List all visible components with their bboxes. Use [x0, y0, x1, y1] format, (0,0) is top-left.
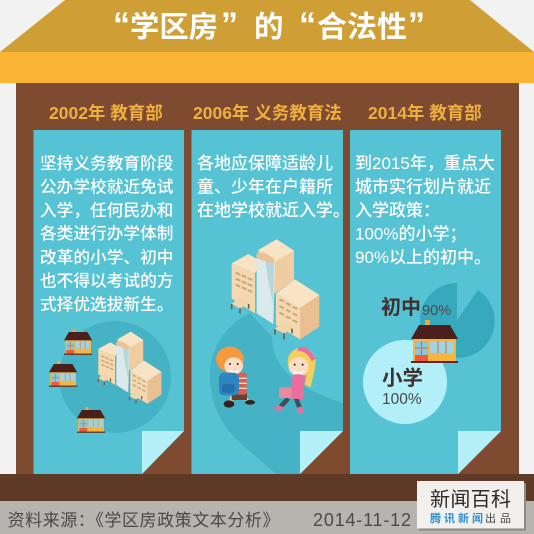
- text block 2014: [355, 154, 495, 267]
- text block 2006: 在地学校就近入学。: [197, 200, 350, 220]
- paper sheet 2006: [192, 130, 343, 474]
- roof eave band: [0, 52, 534, 83]
- source bar: [0, 501, 534, 534]
- icon: girl: [274, 347, 316, 413]
- fold 2002: [142, 431, 184, 474]
- text block 2002: 各类进行办学体制: [40, 223, 174, 243]
- floor band: [0, 474, 534, 501]
- title: [113, 6, 425, 44]
- text block 2002: 公办学校就近免试: [40, 176, 174, 196]
- title: ”: [408, 6, 425, 44]
- title: 的: [254, 11, 284, 44]
- text block 2014: 入学政策：: [355, 200, 440, 220]
- circle: primary 100%: [363, 340, 447, 424]
- fold 2006: [300, 431, 343, 474]
- house roof: [0, 0, 534, 52]
- house wall: [16, 83, 519, 475]
- label: primary: 小学: [382, 366, 423, 390]
- column headings: 2014年 教育部: [368, 103, 482, 123]
- logo badge: 新闻百科: [430, 488, 511, 511]
- text block 2002: 改革的小学、初中: [40, 247, 174, 267]
- circle behind school: [59, 321, 171, 433]
- text block 2002: 式择优选拔新生。: [40, 295, 174, 314]
- text block 2002: 也不得以考试的方: [40, 270, 174, 290]
- pie: junior high 90%: [420, 283, 495, 358]
- icon: school buildings: [232, 239, 319, 339]
- panel: 2006: [192, 130, 350, 474]
- label: junior high: [381, 296, 451, 319]
- icon: house top: [64, 329, 92, 355]
- title: “: [113, 6, 130, 44]
- text block 2002: [40, 154, 174, 314]
- logo badge: 出品: [485, 511, 511, 525]
- title: 合法性: [317, 11, 407, 44]
- icon: house middle: [49, 361, 77, 387]
- label: junior high: 初中: [381, 296, 421, 319]
- title: ”: [221, 6, 238, 44]
- icon: boy: [216, 347, 255, 408]
- title: 学区房: [130, 11, 218, 44]
- logo badge: 腾讯新闻: [430, 511, 483, 525]
- column headings: [49, 103, 482, 123]
- path shadow: [210, 313, 343, 474]
- text block 2014: 城市实行划片就近: [355, 176, 491, 196]
- text block 2006: 各地应保障适龄儿: [197, 154, 333, 173]
- panel: 2014: [350, 130, 501, 474]
- panel: 2002: [34, 130, 184, 474]
- label: primary: [382, 366, 423, 408]
- logo badge: [417, 481, 526, 530]
- paper sheet 2002: [34, 130, 184, 474]
- date: 2014-11-12: [313, 510, 411, 530]
- fold 2014: [458, 431, 501, 474]
- text block 2006: [197, 154, 350, 220]
- text block 2002: 坚持义务教育阶段: [40, 154, 174, 173]
- text block 2014: 到2015年，重点大: [355, 154, 495, 173]
- text block 2014: 90%以上的初中。: [355, 248, 491, 267]
- text block 2002: 入学，任何民办和: [40, 200, 174, 220]
- icon: house: [411, 320, 458, 363]
- column headings: 2006年 义务教育法: [193, 103, 342, 123]
- column headings: 2002年 教育部: [49, 103, 163, 123]
- source text: 资料来源：《学区房政策文本分析》: [8, 511, 280, 530]
- paper sheet 2014: [350, 130, 501, 474]
- label: junior high: 90%: [422, 303, 451, 319]
- icon: house bottom: [77, 407, 105, 433]
- text block 2006: 童、少年在户籍所: [197, 178, 333, 196]
- icon: school buildings: [98, 332, 161, 404]
- title: “: [299, 6, 316, 44]
- text block 2014: 100%的小学；: [355, 224, 466, 244]
- label: primary: 100%: [382, 391, 422, 408]
